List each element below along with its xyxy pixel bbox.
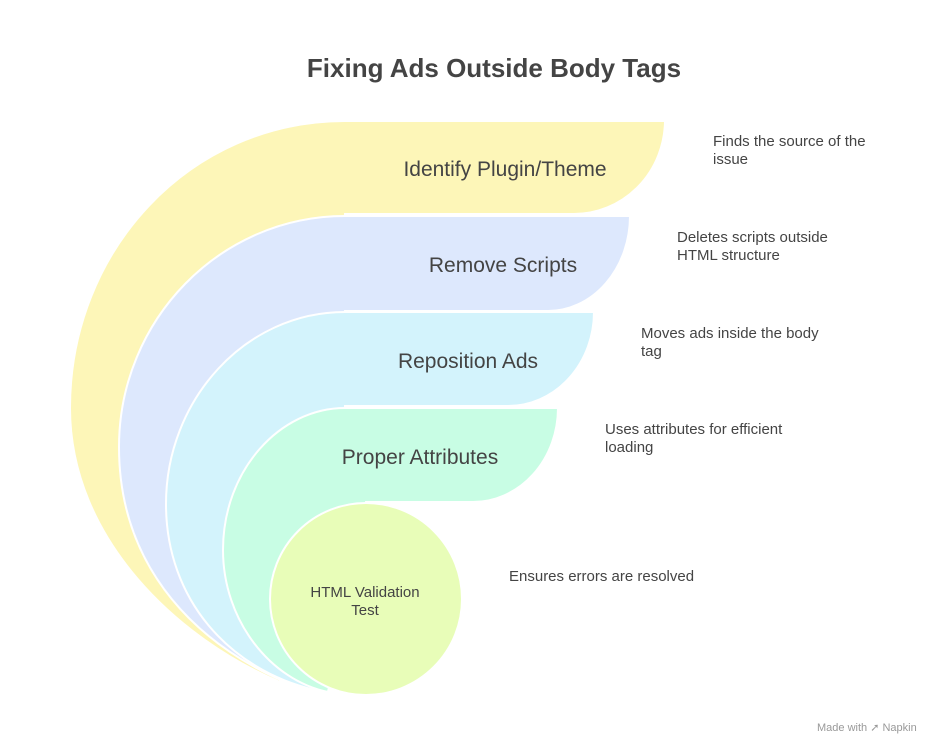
circle: HTML Validation Test: HTML Validation bbox=[310, 584, 420, 601]
title: Fixing Ads Outside Body Tags bbox=[307, 53, 681, 83]
circle: HTML Validation Test: Test bbox=[351, 602, 380, 619]
layer: Reposition Ads: Reposition Ads bbox=[398, 350, 538, 373]
description: attributes: Uses attributes for efficient loading bbox=[605, 421, 782, 456]
layer: Proper Attributes: Proper Attributes bbox=[342, 446, 498, 469]
layer: Remove Scripts: Remove Scripts bbox=[429, 254, 577, 277]
description: remove: Deletes scripts outside HTML structure bbox=[677, 229, 828, 264]
description: identify: Finds the source of the issue bbox=[713, 133, 866, 168]
footer: made with napkin: Made with ➚ Napkin bbox=[817, 722, 917, 734]
description: validation: Ensures errors are resolved bbox=[509, 568, 694, 585]
layer: Reposition Ads bbox=[166, 312, 594, 690]
layer: Identify Plugin/Theme: Identify Plugin/Theme bbox=[403, 158, 607, 181]
description: reposition: Moves ads inside the body tag bbox=[641, 325, 819, 360]
circle: HTML Validation Test bbox=[270, 503, 462, 695]
layer: Proper Attributes bbox=[223, 408, 558, 692]
